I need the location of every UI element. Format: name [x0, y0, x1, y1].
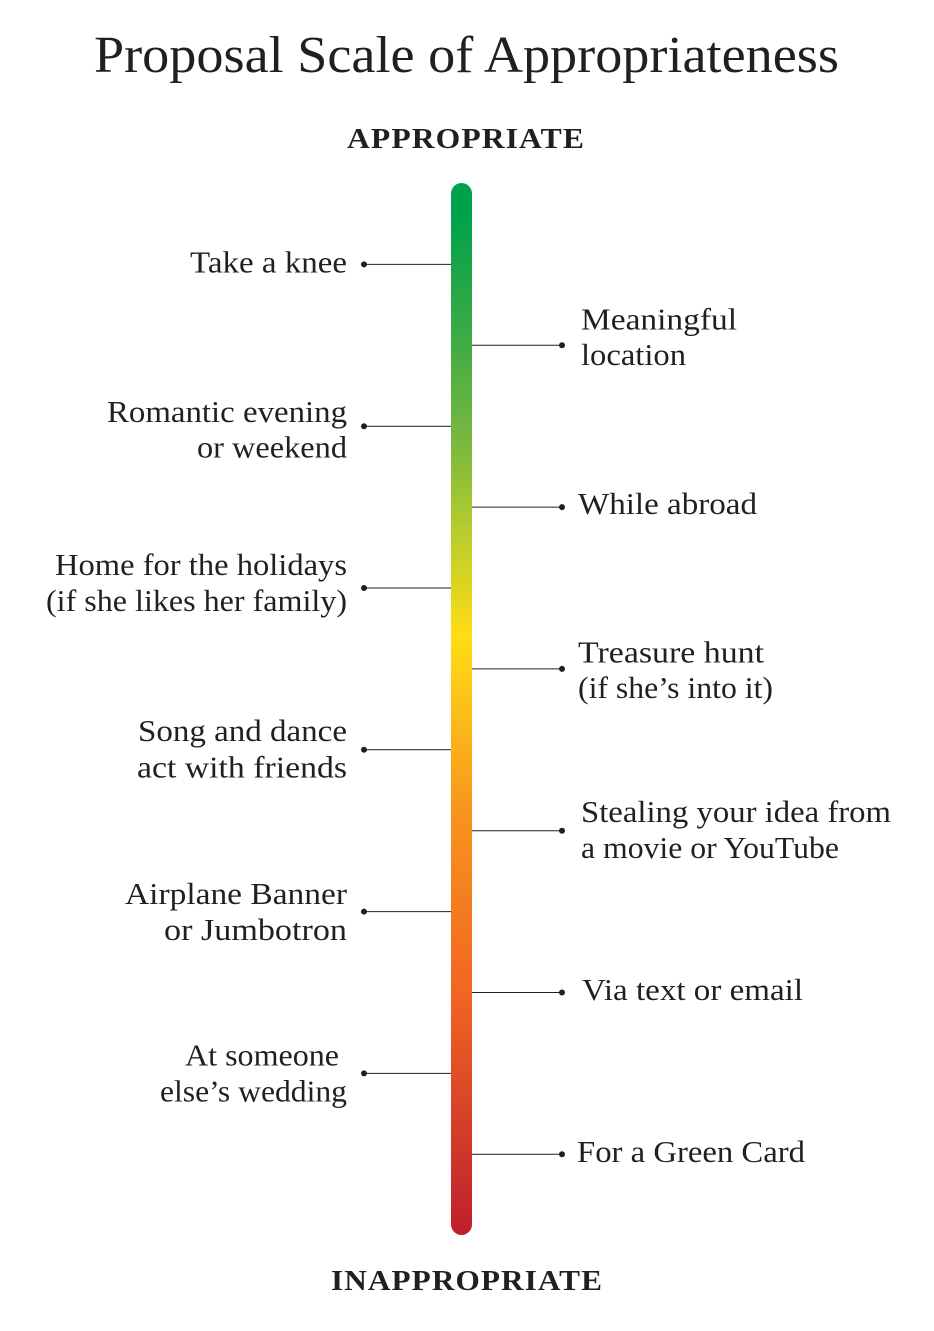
- left item: airplane banner: Airplane Banner: [125, 877, 347, 911]
- left item: home for the holidays: (if she likes her family): [46, 584, 347, 618]
- right item: meaningful location: Meaningful: [581, 302, 737, 336]
- right item: stealing your idea: [472, 795, 891, 865]
- left item: home for the holidays: Home for the holidays: [55, 548, 347, 582]
- left item: at someone else's wedding: At someone: [185, 1038, 339, 1072]
- left item: romantic evening: [107, 395, 451, 464]
- left item: song and dance: [137, 714, 451, 784]
- top label: appropriate: APPROPRIATE: [347, 123, 585, 155]
- left item: song and dance: act with friends: [137, 750, 347, 784]
- right item: meaningful location: [472, 302, 737, 372]
- left item: take a knee: [190, 246, 451, 280]
- right item: meaningful location: location: [581, 338, 686, 372]
- right item: treasure hunt: [472, 636, 773, 705]
- right item: via text or email: Via text or email: [582, 973, 803, 1007]
- right item: via text or email: [472, 973, 803, 1007]
- right item: while abroad: [472, 487, 757, 521]
- left item: romantic evening: Romantic evening: [107, 395, 347, 429]
- left item: at someone else's wedding: else’s wedding: [160, 1074, 347, 1108]
- right item: stealing your idea: Stealing your idea from: [581, 795, 891, 829]
- right item: treasure hunt: Treasure hunt: [578, 636, 765, 670]
- left item: home for the holidays: [46, 548, 451, 618]
- left item: at someone else's wedding: [160, 1038, 451, 1108]
- right item: for a green card: [472, 1135, 805, 1169]
- gradient scale bar: [451, 183, 472, 1235]
- left item: song and dance: Song and dance: [138, 714, 347, 748]
- bottom label: inappropriate: INAPPROPRIATE: [331, 1265, 603, 1297]
- left item: romantic evening: or weekend: [197, 430, 347, 464]
- left item: airplane banner: [125, 877, 451, 947]
- right item: for a green card: For a Green Card: [577, 1135, 805, 1169]
- left item: airplane banner: or Jumbotron: [164, 913, 347, 947]
- right item: stealing your idea: a movie or YouTube: [581, 831, 839, 865]
- right item: while abroad: While abroad: [578, 487, 757, 521]
- right item: treasure hunt: (if she’s into it): [578, 671, 773, 705]
- left item: take a knee: Take a knee: [190, 246, 347, 280]
- title: Proposal Scale of Appropriateness: [94, 27, 839, 84]
